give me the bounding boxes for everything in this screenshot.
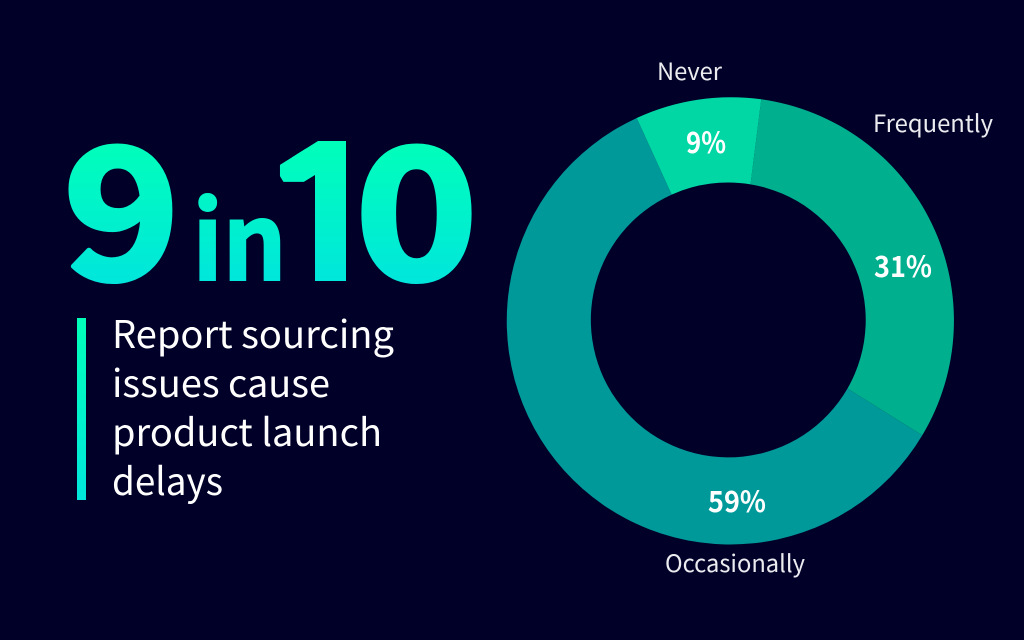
value: 59%: 59% xyxy=(708,479,766,521)
headline: 9 in 10: in xyxy=(192,157,286,311)
headline: 9 in 10: 0 xyxy=(355,70,478,332)
accent bar xyxy=(77,318,86,500)
label: Frequently: Frequently xyxy=(873,104,993,139)
donut chart xyxy=(507,97,954,544)
segment: frequently 31% xyxy=(750,99,954,435)
description text: product launch xyxy=(112,402,382,457)
description text: Report sourcing xyxy=(112,304,394,359)
value: 9%: 9% xyxy=(686,120,726,162)
headline: 9 in 10: 1 xyxy=(271,55,387,338)
headline: 9 in 10 xyxy=(68,141,472,284)
description text: delays xyxy=(112,451,223,506)
description text: issues cause xyxy=(112,353,330,408)
segment: never 9% xyxy=(637,97,761,195)
headline: 9 in 10: 9 xyxy=(63,69,180,332)
description text xyxy=(112,304,394,506)
label: Never: Never xyxy=(657,52,723,87)
value: 31%: 31% xyxy=(874,244,932,286)
segment: occasionally 59% xyxy=(507,118,922,544)
label: Occasionally: Occasionally xyxy=(665,544,805,579)
